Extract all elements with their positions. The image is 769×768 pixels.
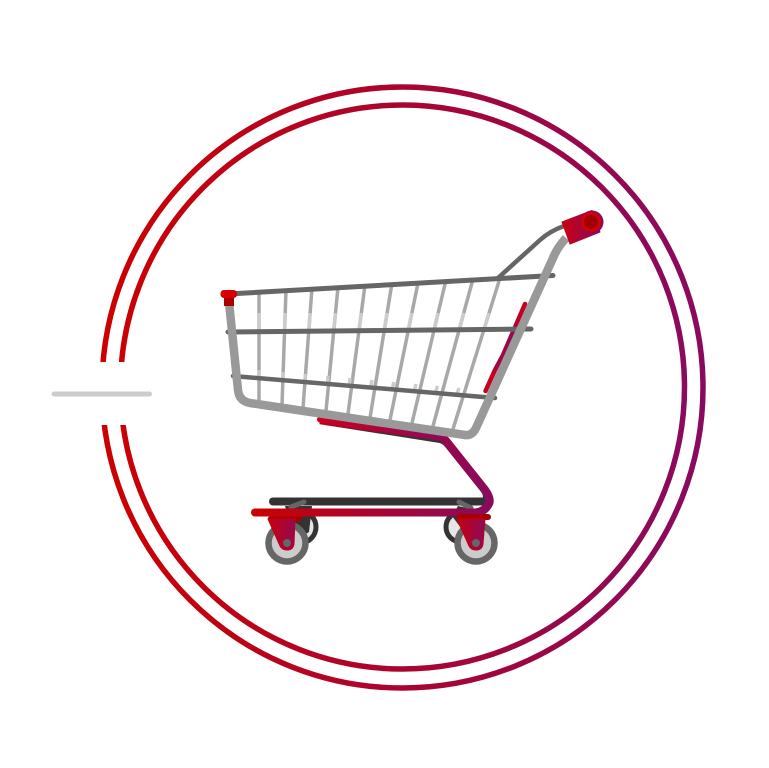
inner ring xyxy=(120,105,684,669)
fork caps xyxy=(291,502,471,508)
handle end ring xyxy=(581,212,601,232)
ring gap xyxy=(92,362,132,425)
front left wheel xyxy=(268,516,306,562)
right cap xyxy=(459,502,471,508)
wire 4 xyxy=(326,287,338,411)
fork plate xyxy=(460,514,488,520)
wire 9 xyxy=(433,279,473,426)
chassis bar xyxy=(273,498,483,506)
double ring xyxy=(102,87,703,688)
wire 10 xyxy=(453,278,500,429)
gray dash xyxy=(52,392,152,396)
wire 6 xyxy=(370,283,392,418)
fork xyxy=(457,519,485,550)
basket wires xyxy=(259,278,500,429)
lower rail xyxy=(233,376,495,398)
fork xyxy=(268,519,295,550)
hub xyxy=(283,539,291,547)
shopping cart xyxy=(220,210,604,562)
wire 1 xyxy=(257,292,261,402)
front right wheel xyxy=(457,517,494,562)
handle neck xyxy=(498,226,564,278)
wire 3 xyxy=(303,288,312,408)
chassis upper tube xyxy=(320,420,440,436)
back wheels xyxy=(284,506,480,543)
cap lower xyxy=(224,296,234,306)
handle end centre xyxy=(584,215,598,229)
chassis tube xyxy=(320,420,489,512)
back right fork xyxy=(452,506,480,540)
handle grip xyxy=(562,210,600,244)
basket frame xyxy=(229,238,566,435)
cap upper xyxy=(220,290,237,298)
chassis shadow xyxy=(325,423,485,502)
tyre xyxy=(268,524,306,562)
wire 5 xyxy=(348,285,365,414)
back left wheel xyxy=(284,511,316,543)
tyre xyxy=(458,524,494,562)
wire 8 xyxy=(412,280,446,423)
wire 2 xyxy=(282,290,286,405)
back right wheel xyxy=(446,512,476,542)
middle rail xyxy=(228,329,531,332)
handle xyxy=(562,210,604,244)
handle end outer xyxy=(580,210,604,234)
corner cap xyxy=(220,290,237,306)
back left fork xyxy=(285,506,312,540)
fork plate xyxy=(268,516,302,522)
hub xyxy=(472,539,480,547)
wire 7 xyxy=(390,283,418,420)
wire highlights xyxy=(259,313,489,394)
bottom red bar xyxy=(255,508,478,516)
outer ring xyxy=(102,87,703,688)
left cap xyxy=(291,502,304,507)
top rail xyxy=(228,276,553,294)
side strip xyxy=(486,304,525,391)
